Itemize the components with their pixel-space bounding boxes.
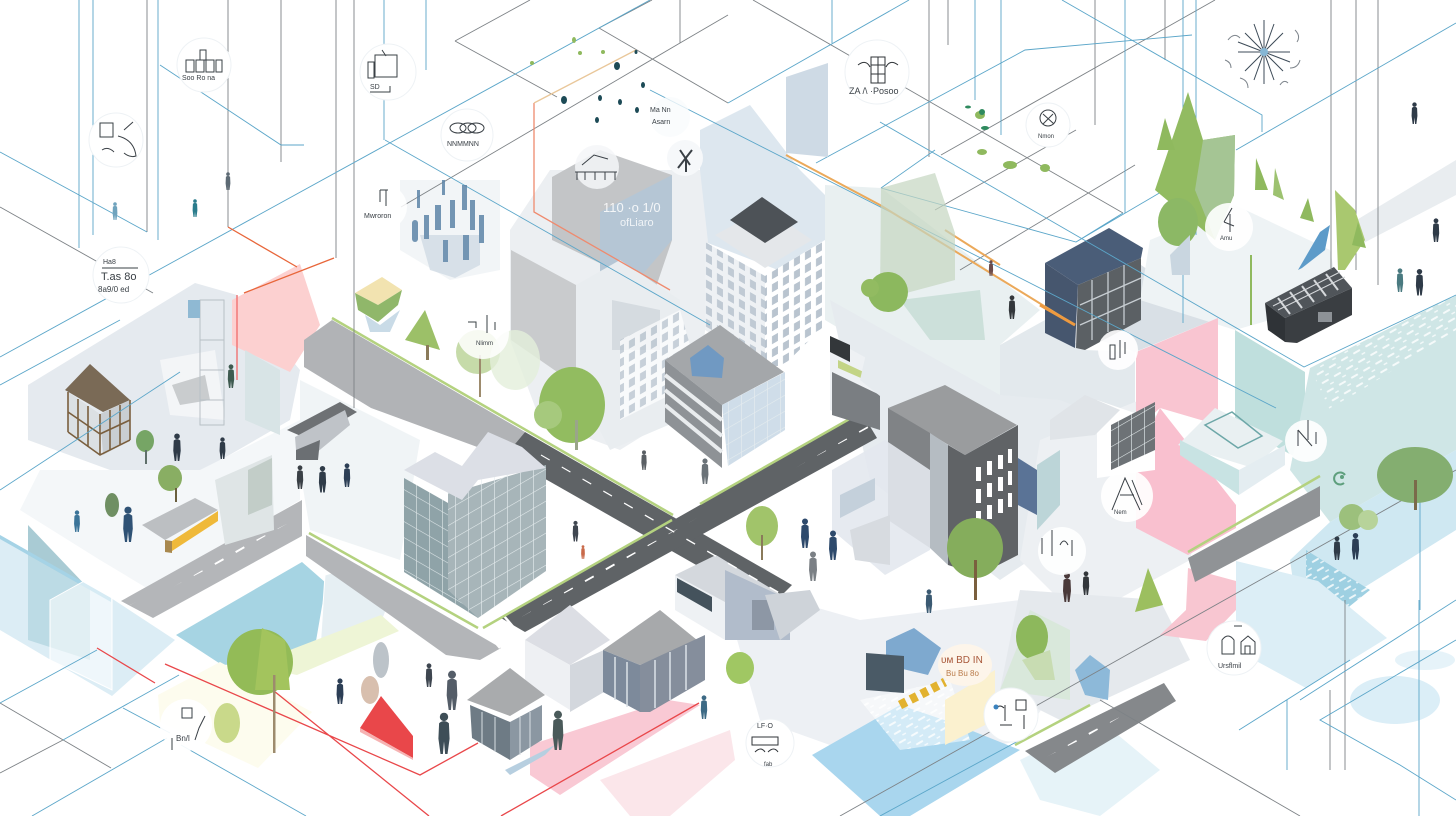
kiosk: rooftop planter box — [355, 277, 402, 332]
pink plots — [232, 264, 1236, 816]
network lines: red and orange — [97, 50, 1075, 816]
tree: tall east of centre — [947, 518, 1003, 600]
installation: blue panel and dark screen — [866, 628, 941, 693]
icon circle: globe — [1026, 103, 1070, 147]
building: grey-blue block — [603, 610, 705, 712]
icon circle: small label: Asarn — [652, 119, 670, 126]
icon circle: emblem: ZA /\ ·Posoo — [849, 86, 899, 96]
icon circle: label: T.as 8o — [101, 271, 136, 283]
road: main avenue — [501, 413, 877, 632]
panel: light blue lower-left zone — [0, 525, 175, 696]
building: teal glass pavilion — [1178, 408, 1285, 495]
icon circle: bottom note — [746, 719, 794, 768]
road: south street — [306, 535, 501, 660]
callout: orange note: Bu Bu 8o — [946, 669, 979, 678]
crowd: hanging figures — [412, 180, 484, 278]
icon circle: tools — [89, 113, 143, 167]
icon circle: houses — [177, 38, 231, 92]
tree: green lollipops left — [105, 430, 182, 517]
pale green lawn — [262, 615, 399, 675]
icon circle: stick figures lower-left — [160, 699, 212, 751]
kiosk: glass pavilion — [467, 668, 555, 775]
tree: sidewalk small — [405, 310, 440, 360]
icon: spiral — [1334, 472, 1345, 484]
building: navy house — [1045, 228, 1143, 350]
callout: orange note — [938, 644, 992, 686]
icon circle: compass sketch: Nem — [1114, 510, 1127, 516]
icon circle: avenue sketch — [1038, 527, 1086, 575]
icon circle: houses: Soo Ro na — [182, 75, 215, 82]
icon circle: emblem — [845, 40, 909, 104]
shrub: pale green lower-left — [214, 703, 240, 743]
building: grid facade — [1050, 395, 1155, 478]
icon circle: arches — [1207, 621, 1261, 675]
callout: orange note: ᴜᴍ BD IN — [941, 655, 983, 666]
icon circle: bottom note: fab — [764, 762, 773, 768]
canopy: yellow shop — [142, 455, 274, 553]
lane markings on crossing street — [533, 448, 780, 593]
building: pale glass block — [832, 440, 930, 575]
kiosk: grey vehicle canopy — [287, 402, 357, 460]
icon circle: small label — [650, 97, 690, 137]
icon circle: hanger: Mwroron — [364, 213, 391, 220]
tower: pale blue monolith — [786, 63, 828, 157]
building: glass tower — [404, 432, 546, 618]
tree: pine cluster — [1155, 92, 1314, 240]
building: brown timber house — [65, 364, 130, 455]
icon circle: pine hut — [1205, 203, 1253, 251]
icon circle: lamp — [1098, 330, 1138, 370]
road: right street — [1188, 486, 1320, 582]
glass frame beside pool — [320, 565, 388, 650]
icon circle: label: Ha8 — [103, 259, 116, 266]
road: crossing street — [505, 432, 792, 607]
green curbs — [309, 318, 1320, 745]
tree: small cluster south — [726, 652, 754, 684]
tree: rooftop green — [861, 272, 908, 312]
tree: pine south-east — [1135, 568, 1163, 612]
icon circle: compass sketch — [1101, 470, 1153, 522]
floating green and teal leaves — [530, 37, 1050, 172]
building: white cube — [525, 605, 610, 712]
tree: planter south — [1016, 615, 1055, 680]
tree: pale sidewalk — [456, 330, 540, 397]
tree: small avenue — [746, 506, 778, 560]
people — [74, 102, 1439, 754]
building: pale stack left — [160, 300, 280, 435]
blue water plaza — [812, 680, 1160, 816]
building: mid-rise with blue roof box — [665, 325, 785, 468]
road: lower-right street — [1025, 683, 1176, 773]
icon circle: bottom note: LF·O — [757, 723, 774, 730]
water pool — [176, 562, 326, 665]
blue kiosk — [1075, 655, 1110, 700]
building: solar hut — [1265, 267, 1352, 343]
overlay text on tower: ofLiaro — [620, 217, 654, 229]
red house installation — [360, 642, 413, 760]
icon circle: pine hut: Amu — [1220, 236, 1232, 242]
icon circle: tree sketch: Nlimm — [476, 341, 493, 347]
tree: blue notice panels — [1170, 225, 1330, 325]
icon circle: dancer — [667, 140, 703, 176]
pale green glass columns — [880, 173, 985, 340]
icon circle: globe: Nmon — [1038, 134, 1054, 140]
icon circle: desk: SD — [370, 84, 380, 91]
icon circle: links: NNMMNN — [447, 141, 479, 148]
building: dark grey tower — [888, 385, 1060, 575]
icon circle: desk — [360, 44, 416, 100]
overlay text on tower — [603, 200, 661, 229]
icon circle: links — [441, 109, 493, 161]
tree: shrub far right — [1339, 504, 1378, 530]
icon circle: rack — [1285, 420, 1327, 462]
icon circle: label: 8a9/0 ed — [98, 285, 129, 294]
icon circle: stick figures lower-left: Bn/l — [176, 734, 190, 743]
building: tall white tower — [705, 197, 825, 366]
icon circle: snowflake — [1224, 12, 1304, 92]
icon circle: hanger — [363, 185, 407, 229]
crosswalk — [483, 616, 521, 648]
building: shop row — [675, 555, 820, 640]
icon circle: figures — [984, 688, 1038, 742]
building: sign block — [830, 336, 895, 430]
teal plots — [1000, 295, 1456, 724]
tree: big green lower-left — [227, 628, 293, 753]
icon circle: tree sketch — [457, 307, 509, 359]
overlay text on tower: 110 ·o 1/0 — [603, 200, 661, 215]
building: large grey block — [511, 150, 700, 450]
icon circle: small label: Ma Nn — [650, 107, 671, 114]
tree: round cluster right — [1158, 190, 1366, 270]
tree: large far right — [1377, 447, 1453, 510]
icon circle: house sketch — [575, 145, 619, 189]
road: lower-left street — [121, 500, 302, 618]
pale yellow plot — [158, 662, 312, 768]
road: upper-left street — [304, 320, 525, 456]
tree: central — [534, 367, 605, 450]
icon circle: label — [93, 247, 149, 303]
icon circle: arches: Ursflmil — [1218, 663, 1242, 670]
yellow dots and panel — [900, 670, 995, 745]
